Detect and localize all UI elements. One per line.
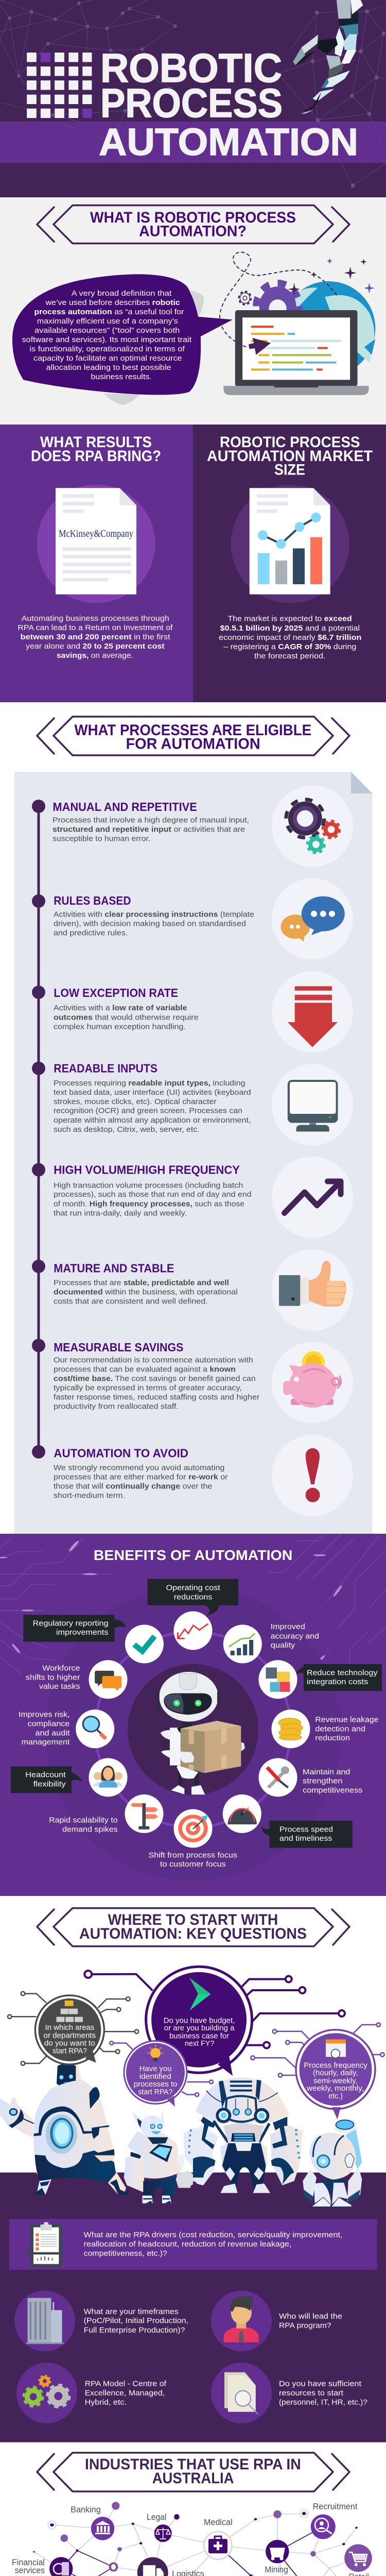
item: manual and repetitive bbox=[52, 800, 249, 843]
item: automation to avoid: processes that are either marked for re-work or bbox=[54, 1472, 228, 1481]
question bubble: budget: or are you building a bbox=[164, 2024, 235, 2032]
question bubble: departments: In which areas bbox=[45, 2023, 94, 2032]
item: automation to avoid bbox=[54, 1447, 228, 1500]
icon: robot arm bbox=[293, 0, 363, 113]
speech bubble: definition bbox=[12, 274, 233, 405]
heading badge: eligible processes: FOR AUTOMATION bbox=[126, 736, 260, 753]
question bubble: process frequency: etc.) bbox=[328, 2092, 343, 2100]
hero banner bbox=[0, 0, 386, 197]
icon: people bbox=[93, 1766, 122, 1788]
labels: industries: Mining bbox=[265, 2565, 288, 2574]
labels: industries: Recruitment bbox=[313, 2501, 358, 2511]
label: risk and compliance bbox=[19, 1710, 70, 1747]
panel: market size bbox=[193, 425, 386, 702]
question bubble: budget: business case for bbox=[169, 2031, 229, 2040]
question: RPA model bbox=[16, 2363, 167, 2424]
item: manual and repetitive: MANUAL AND REPETITIVE bbox=[52, 800, 197, 814]
item: low exception rate: outcomes that would otherwise require bbox=[54, 1013, 199, 1022]
question bubble: identified processes: processes to bbox=[134, 2080, 177, 2089]
label: risk and compliance: management bbox=[22, 1738, 70, 1747]
icon: chat bbox=[95, 1671, 121, 1691]
question bubble: identified processes: Have you bbox=[139, 2064, 172, 2073]
heading badge: industries: INDUSTRIES THAT USE RPA IN bbox=[85, 2456, 301, 2473]
item: mature and stable: documented within the business, with operational bbox=[54, 1288, 238, 1296]
item: manual and repetitive: Processes that involve a high degree of manual input, bbox=[52, 816, 249, 824]
item: automation to avoid: AUTOMATION TO AVOID bbox=[54, 1447, 188, 1460]
label: improved accuracy: accuracy and bbox=[271, 1632, 319, 1640]
item: readable inputs: such as desktop, Citrix, web, server, etc. bbox=[54, 1125, 200, 1134]
heading badge: what is RPA bbox=[37, 205, 349, 243]
label: competitiveness: strengthen bbox=[303, 1777, 343, 1786]
node: banking bbox=[91, 2517, 114, 2540]
item: readable inputs: text based data, user interface (UI) activites (keyboard bbox=[54, 1088, 251, 1097]
icon: McKinsey report bbox=[37, 485, 155, 603]
heading badge: where to start: AUTOMATION: KEY QUESTIONS bbox=[79, 1925, 307, 1942]
item: automation to avoid: short-medium term. bbox=[54, 1492, 125, 1500]
icon: chat bubbles bbox=[281, 896, 345, 942]
question bubble: budget: Do you have budget, bbox=[164, 2016, 235, 2025]
icon: puzzle bbox=[266, 1668, 290, 1692]
label: risk and compliance: and audit bbox=[35, 1728, 70, 1737]
label: rapid scalability: demand spikes bbox=[62, 1825, 118, 1834]
question bubble: process frequency: (hourly, daily, bbox=[313, 2069, 358, 2077]
heading badge: what is RPA: WHAT IS ROBOTIC PROCESS bbox=[90, 209, 296, 226]
item: readable inputs: READABLE INPUTS bbox=[54, 1062, 157, 1075]
label: customer focus: to customer focus bbox=[160, 1860, 226, 1869]
node: recruitment bbox=[311, 2514, 336, 2539]
question: sufficient resources: Do you have sufficient bbox=[279, 2379, 362, 2388]
item: rules based: Activities with clear processing instructions (template bbox=[54, 910, 254, 919]
label: workforce shifts: Workforce bbox=[42, 1664, 80, 1672]
heading: AUTOMATION MARKET bbox=[207, 448, 373, 465]
callout: operating cost reductions: Operating cost bbox=[166, 1584, 221, 1592]
item: automation to avoid: We strongly recommend you avoid automating bbox=[54, 1464, 224, 1472]
heading badge: industries bbox=[37, 2453, 349, 2492]
item: rules based bbox=[54, 894, 254, 938]
heading badge: eligible processes: WHAT PROCESSES ARE ELIGIBLE bbox=[74, 722, 311, 739]
question: sufficient resources bbox=[211, 2363, 367, 2424]
text: market forecast bbox=[219, 615, 361, 660]
icon: signpost bbox=[130, 1803, 158, 1829]
labels: industries: Financial bbox=[12, 2557, 45, 2567]
icon: monitor bbox=[288, 1080, 338, 1131]
label: improved accuracy bbox=[271, 1622, 319, 1650]
label: improved accuracy: Improved bbox=[271, 1622, 305, 1631]
callout: regulatory reporting bbox=[24, 1615, 126, 1642]
heading badge: where to start bbox=[37, 1908, 349, 1946]
icon: laptop with globe and gear bbox=[220, 252, 375, 395]
question bar: RPA drivers: competitiveness, etc.)? bbox=[84, 2249, 167, 2258]
speech bubble: definition: business results. bbox=[91, 372, 152, 381]
illustration: robot two bbox=[124, 2111, 191, 2204]
node: medical bbox=[204, 2532, 232, 2560]
question: RPA model: Hybrid, etc. bbox=[85, 2398, 127, 2406]
label: revenue leakage bbox=[315, 1715, 378, 1742]
title bbox=[99, 45, 358, 163]
icon: gears bbox=[286, 800, 340, 853]
network: industries bbox=[12, 2501, 372, 2576]
item: measurable savings: processes that can be evaluated against a known bbox=[54, 1365, 236, 1374]
text: RPA ROI: between 30 and 200 percent in the first bbox=[21, 633, 170, 641]
heading bbox=[207, 434, 373, 479]
icon: magnifier bbox=[83, 1717, 106, 1739]
item: high volume high frequency: that run intra-daily, daily and weekly. bbox=[54, 1209, 187, 1217]
speech bubble: definition: capacity to facilitate an optimal resource bbox=[33, 354, 182, 363]
title: ROBOTIC bbox=[100, 45, 282, 91]
heading badge: industries: AUSTRALIA bbox=[152, 2470, 234, 2487]
labels: industries bbox=[12, 2501, 369, 2576]
item: readable inputs: operate within almost any application or environment, bbox=[54, 1116, 251, 1125]
illustration: robot four bbox=[303, 2120, 362, 2207]
question bubble: process frequency: semi-weekly, bbox=[313, 2076, 358, 2085]
illustration: robot one bbox=[0, 2063, 131, 2195]
text: market forecast: economic impact of nearly $6.7 trillion bbox=[219, 633, 361, 642]
item: low exception rate: LOW EXCEPTION RATE bbox=[54, 986, 178, 999]
heading badge: what is RPA: AUTOMATION? bbox=[139, 223, 247, 240]
label: risk and compliance: compliance bbox=[28, 1719, 69, 1728]
node: legal bbox=[154, 2524, 172, 2542]
labels: industries: Medical bbox=[204, 2517, 233, 2527]
item: measurable savings: typically be expressed in terms of greater accuracy, bbox=[54, 1384, 242, 1393]
text: RPA ROI: savings, on average. bbox=[57, 651, 133, 660]
text: RPA ROI bbox=[17, 614, 173, 660]
item: mature and stable: costs that are consistent and well defined. bbox=[54, 1297, 208, 1306]
callout: technology integration: Reduce technology bbox=[307, 1668, 378, 1677]
heading bbox=[31, 434, 161, 465]
heading: DOES RPA BRING? bbox=[31, 448, 161, 465]
question bubble: budget bbox=[84, 1967, 345, 2076]
item: high volume high frequency: of month. High frequency processes, such as those bbox=[54, 1199, 244, 1209]
item: low exception rate bbox=[54, 986, 199, 1031]
icon: tools bbox=[267, 1767, 289, 1788]
item: mature and stable: MATURE AND STABLE bbox=[54, 1262, 174, 1275]
item: rules based: driven), with decision making based on standardised bbox=[54, 919, 246, 928]
label: workforce shifts bbox=[26, 1664, 80, 1691]
item: measurable savings: Our recommendation is to commence automation with bbox=[54, 1356, 253, 1365]
item: automation to avoid: those that will continually change over the bbox=[54, 1482, 212, 1491]
question bar: RPA drivers: What are the RPA drivers (cost reduction, service/quality improvement, bbox=[84, 2230, 342, 2239]
labels: industries: Legal bbox=[147, 2512, 166, 2522]
question: timeframes: Full Enterprise Production)? bbox=[84, 2326, 185, 2335]
node: logistics bbox=[137, 2557, 168, 2576]
question bubble: departments: do you want to bbox=[44, 2039, 95, 2047]
label: revenue leakage: Revenue leakage bbox=[315, 1715, 378, 1724]
question bubble: departments: start RPA? bbox=[52, 2047, 87, 2056]
callout: process speed: Process speed bbox=[279, 1825, 333, 1834]
text: RPA ROI: Automating business processes through bbox=[22, 614, 169, 623]
icon: down arrow bbox=[288, 986, 338, 1047]
question: sufficient resources: resources to start bbox=[279, 2388, 344, 2397]
callout: technology integration: integration costs bbox=[307, 1677, 368, 1686]
icon: check mark bbox=[134, 1636, 154, 1651]
labels: industries: services bbox=[15, 2566, 45, 2575]
question: timeframes bbox=[14, 2291, 188, 2351]
label: risk and compliance: Improves risk, bbox=[19, 1710, 69, 1719]
speech bubble: definition: software and services). Its most important trait bbox=[22, 335, 192, 344]
callout: process speed: and timeliness bbox=[279, 1834, 332, 1843]
heading: WHAT RESULTS bbox=[40, 434, 152, 451]
question: RPA model: RPA Model - Centre of bbox=[85, 2379, 167, 2388]
question bubble: identified processes: identified bbox=[139, 2072, 171, 2081]
title: PROCESS bbox=[100, 80, 283, 126]
icon: accuracy chart bbox=[229, 1634, 255, 1655]
icon: cost down arrow bbox=[178, 1624, 208, 1638]
heading: ROBOTIC PROCESS bbox=[220, 434, 360, 451]
label: customer focus bbox=[148, 1851, 237, 1869]
label: competitiveness: Maintain and bbox=[303, 1768, 350, 1776]
item: measurable savings bbox=[54, 1341, 259, 1411]
label: rapid scalability bbox=[49, 1816, 118, 1834]
item: low exception rate: Activities with a low rate of variable bbox=[54, 1004, 187, 1012]
item: high volume high frequency: HIGH VOLUME/HIGH FREQUENCY bbox=[54, 1163, 240, 1177]
item: rules based: RULES BASED bbox=[54, 894, 131, 907]
label: revenue leakage: detection and bbox=[315, 1724, 365, 1733]
speech bubble: definition: process automation as “a useful tool for bbox=[34, 308, 184, 316]
item: low exception rate: complex human exception handling. bbox=[54, 1022, 186, 1031]
icon: piggy bank bbox=[283, 1351, 341, 1408]
icon: trend arrow bbox=[285, 1181, 341, 1213]
item: high volume high frequency: High transaction volume processes (including batch bbox=[54, 1181, 243, 1190]
item: rules based: and predictive rules. bbox=[54, 929, 128, 938]
label: workforce shifts: value tasks bbox=[39, 1682, 80, 1691]
text: market forecast: The market is expected to exceed bbox=[228, 615, 352, 623]
item: manual and repetitive: susceptible to human error. bbox=[52, 835, 150, 843]
question: who will lead: Who will lead the bbox=[279, 2312, 342, 2320]
label: workforce shifts: shifts to higher bbox=[26, 1673, 80, 1682]
icon: chart report bbox=[231, 485, 349, 603]
panel: what is RPA bbox=[0, 197, 386, 425]
heading badge: where to start: WHERE TO START WITH bbox=[108, 1911, 278, 1928]
question bar: RPA drivers: reallocation of headcount, reduction of revenue leakage, bbox=[84, 2240, 291, 2248]
speech bubble: definition: available resources” (“tool” covers both bbox=[34, 326, 180, 335]
item: mature and stable: Processes that are stable, predictable and well bbox=[54, 1279, 229, 1287]
text: RPA ROI: year alone and 20 to 25 percent cost bbox=[26, 642, 165, 651]
heading: SIZE bbox=[274, 462, 305, 479]
illustration: robot three bbox=[177, 2078, 303, 2193]
item: measurable savings: MEASURABLE SAVINGS bbox=[54, 1341, 183, 1354]
speech bubble: definition: A very broad definition that bbox=[72, 289, 172, 298]
title: AUTOMATION bbox=[99, 121, 358, 163]
callout: headcount flexibility: flexibility bbox=[33, 1780, 66, 1788]
question bubble: budget: next FY? bbox=[185, 2039, 214, 2048]
question bubble: departments bbox=[8, 1992, 138, 2065]
item: manual and repetitive: structured and repetitive input or activities that are bbox=[52, 825, 245, 834]
illustration: robot with box bbox=[157, 1672, 245, 1794]
label: competitiveness bbox=[303, 1768, 362, 1795]
icon: speedometer bbox=[227, 1808, 257, 1824]
benefit icon circles bbox=[76, 1612, 310, 1848]
text: market forecast: – registering a CAGR of 30% during bbox=[223, 642, 356, 651]
callout: regulatory reporting: improvements bbox=[56, 1628, 108, 1637]
label: revenue leakage: reduction bbox=[315, 1734, 350, 1742]
item: readable inputs: strokes, mouse clicks, etc). Optical character bbox=[54, 1097, 217, 1106]
item: high volume high frequency bbox=[54, 1163, 251, 1217]
callout: regulatory reporting: Regulatory reporting bbox=[33, 1619, 108, 1628]
label: rapid scalability: Rapid scalability to bbox=[49, 1816, 118, 1825]
question: who will lead: RPA program? bbox=[279, 2321, 331, 2330]
icon: McKinsey report: McKinsey&Company bbox=[59, 528, 133, 539]
panel: eligible process list bbox=[14, 772, 372, 1534]
speech bubble: definition: is functionality, operationalized in terms of bbox=[29, 345, 185, 353]
icon: target bbox=[178, 1815, 208, 1842]
node: financial services bbox=[49, 2557, 73, 2576]
callout: operating cost reductions: reductions bbox=[174, 1593, 212, 1601]
question bubble: process frequency: weekly, monthly, bbox=[306, 2084, 364, 2093]
item: measurable savings: faster response times, reduced staffing costs and higher bbox=[54, 1393, 259, 1401]
icon: exclamation mark bbox=[306, 1448, 320, 1502]
callout: process speed bbox=[261, 1821, 353, 1848]
question: timeframes: What are your timeframes bbox=[84, 2308, 179, 2316]
item: readable inputs: Processes requiring readable input types, including bbox=[54, 1079, 245, 1088]
labels: industries: Banking bbox=[71, 2504, 101, 2514]
item: high volume high frequency: processes), such as those that run end of day and end bbox=[54, 1190, 251, 1199]
heading badge: eligible processes bbox=[37, 717, 349, 755]
question: timeframes: (PoC/Pilot, Initial Production, bbox=[84, 2316, 188, 2325]
item: measurable savings: cost/time base. The cost savings or benefit gained can bbox=[54, 1374, 256, 1383]
callout: headcount flexibility bbox=[11, 1767, 83, 1793]
question bubble: process frequency bbox=[251, 2023, 384, 2120]
node: mining bbox=[266, 2540, 289, 2563]
panel: what results does RPA bring bbox=[0, 425, 193, 702]
panel: key questions background bbox=[0, 2173, 386, 2442]
question bubble: process frequency: Process frequency bbox=[304, 2061, 367, 2070]
question: RPA model: Excellence, Managed, bbox=[85, 2388, 165, 2397]
item: readable inputs bbox=[54, 1062, 251, 1134]
item: readable inputs: recognition (OCR) and green screen. Processes can bbox=[54, 1107, 242, 1115]
question bar: RPA drivers bbox=[9, 2219, 377, 2270]
speech bubble: definition: maximally efficient use of a company’s bbox=[37, 317, 178, 326]
question bubble: identified processes: start RPA? bbox=[138, 2088, 172, 2096]
speech bubble: definition: we’ve used before describes robotic bbox=[45, 298, 180, 307]
callout: operating cost reductions bbox=[148, 1579, 238, 1616]
question: who will lead bbox=[211, 2291, 342, 2351]
callout: headcount flexibility: Headcount bbox=[25, 1771, 66, 1780]
speech bubble: definition: allocation leading to best possible bbox=[46, 363, 171, 372]
label: customer focus: Shift from process focus bbox=[148, 1851, 237, 1859]
text: market forecast: $0.5.1 billion by 2025 and a potential bbox=[220, 624, 360, 633]
question: sufficient resources: (personnel, IT, HR, etc.)? bbox=[279, 2398, 367, 2406]
text: RPA ROI: RPA can lead to a Return on Investment of bbox=[17, 623, 173, 632]
icon: coins bbox=[278, 1718, 303, 1740]
label: improved accuracy: quality bbox=[271, 1641, 295, 1650]
item: mature and stable bbox=[54, 1262, 238, 1306]
icon: thumbs up bbox=[279, 1261, 346, 1307]
question bubble: identified processes bbox=[110, 2041, 213, 2107]
heading: BENEFITS OF AUTOMATION bbox=[94, 1547, 292, 1563]
callout: technology integration bbox=[296, 1664, 382, 1691]
item: measurable savings: productivity from reallocated staff. bbox=[54, 1402, 179, 1411]
logo grid bbox=[27, 53, 92, 118]
label: competitiveness: competitiveness bbox=[303, 1786, 362, 1795]
node: retail bbox=[344, 2544, 372, 2572]
panel: benefits of automation bbox=[0, 1534, 386, 1896]
text: market forecast: the forecast period. bbox=[254, 652, 325, 660]
question bubble: departments: or departments bbox=[44, 2031, 96, 2040]
